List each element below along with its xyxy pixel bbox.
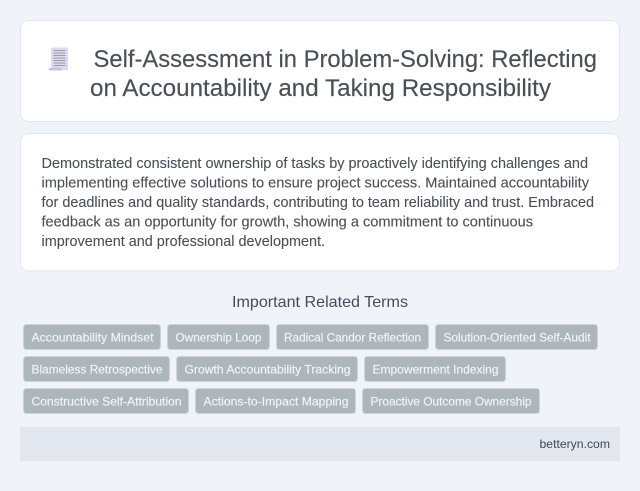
tag: Solution-Oriented Self-Audit [436,324,598,350]
tag: Ownership Loop [168,324,270,350]
tag: Growth Accountability Tracking: Growth Accountability Tracking [184,362,350,376]
tag: Accountability Mindset [24,324,160,350]
tag: Actions-to-Impact Mapping [196,388,356,414]
panel: header card [20,20,620,122]
tag: Radical Candor Reflection [276,324,428,350]
tag list [24,324,598,414]
summary text: implementing effective solutions to ensure project success. Maintained accountability [42,174,589,192]
summary text [42,155,594,250]
tag: Constructive Self-Attribution: Constructive Self-Attribution [32,394,182,408]
summary text: Demonstrated consistent ownership of tasks by proactively identifying challenges and [42,155,588,172]
tag: Proactive Outcome Ownership: Proactive Outcome Ownership [370,394,532,408]
footer bar [20,427,620,461]
panel: summary card [20,134,620,271]
heading: important related terms: Important Related Terms [232,294,408,311]
tag: Blameless Retrospective: Blameless Retrospective [32,362,163,376]
tag: Empowerment Indexing: Empowerment Indexing [372,362,498,376]
summary text: for deadlines and quality standards, contributing to team reliability and trust. Embraced [42,194,594,211]
tag: Ownership Loop: Ownership Loop [176,330,262,344]
tag: Blameless Retrospective [24,356,170,382]
title: on Accountability and Taking Responsibility [90,75,551,102]
title [90,46,597,102]
tag: Constructive Self-Attribution [24,388,188,414]
tag: Growth Accountability Tracking [176,356,358,382]
footer source text: betteryn.com [540,437,610,451]
summary text: improvement and professional development. [42,233,325,250]
tag: Solution-Oriented Self-Audit: Solution-Oriented Self-Audit [444,330,591,344]
icon: scroll document [48,48,68,70]
tag: Actions-to-Impact Mapping: Actions-to-Impact Mapping [204,394,348,408]
title: Self-Assessment in Problem-Solving: Reflecting [94,46,597,73]
tag: Empowerment Indexing [364,356,506,382]
summary text: feedback as an opportunity for growth, showing a commitment to continuous [42,214,533,230]
tag: Radical Candor Reflection: Radical Candor Reflection [284,330,421,344]
tag: Proactive Outcome Ownership [362,388,540,414]
tag: Accountability Mindset: Accountability Mindset [32,330,154,344]
